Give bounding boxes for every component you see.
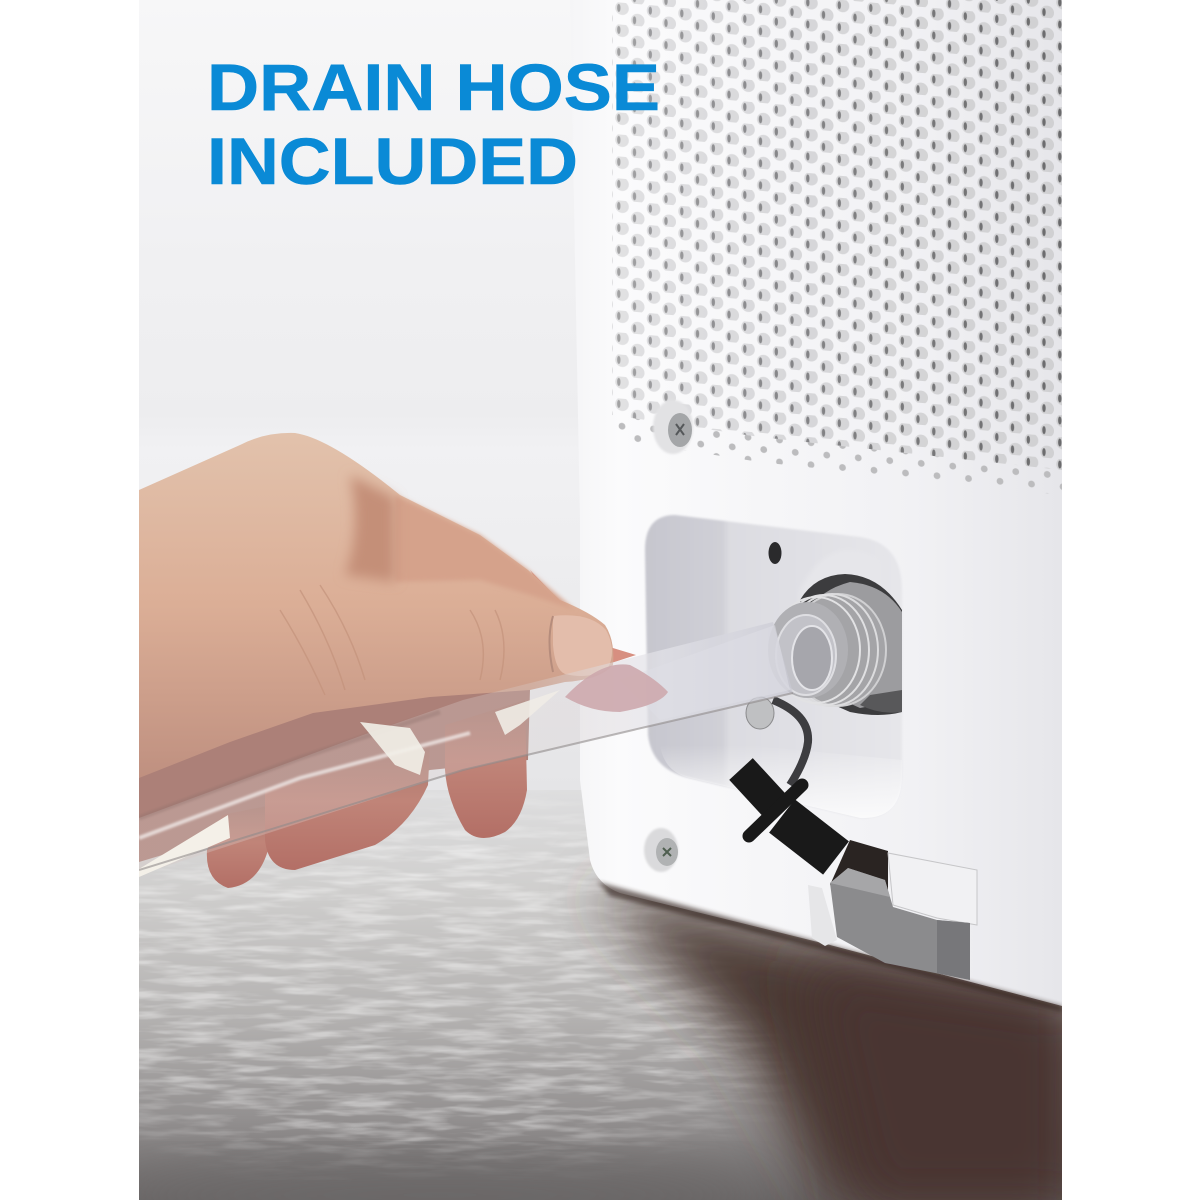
background wall	[139, 2, 582, 790]
transparent drain hose	[139, 622, 793, 877]
knuckle crease shadow	[345, 475, 395, 582]
lower screw	[644, 828, 678, 872]
index fingertip	[530, 570, 636, 670]
ring finger	[265, 770, 429, 870]
index fingernail	[565, 664, 668, 712]
skin wrinkles	[280, 585, 504, 695]
pinky finger	[206, 824, 268, 888]
middle screw	[746, 697, 774, 729]
upper screw	[653, 400, 693, 454]
recessed drain cavity	[645, 515, 902, 818]
headline: DRAIN HOSE	[207, 50, 660, 124]
thumbnail	[553, 615, 612, 676]
wooden floor	[60, 790, 1080, 1200]
product photo panel	[139, 0, 1062, 1200]
hand holding hose	[139, 433, 636, 888]
lower palm seen through hose	[139, 690, 530, 862]
palm and thumb	[139, 433, 613, 778]
headline	[211, 64, 658, 185]
black drain plug	[741, 769, 836, 858]
gray latch mechanism	[808, 840, 977, 980]
index finger shading	[395, 495, 575, 610]
plug strap	[773, 700, 808, 785]
middle finger	[445, 740, 527, 838]
small hole	[768, 542, 782, 564]
headline: INCLUDED	[207, 124, 578, 198]
dehumidifier body	[570, 0, 1062, 1012]
drain port opening	[800, 574, 902, 715]
ventilation perforations	[600, 0, 1062, 500]
threaded nozzle	[768, 594, 886, 706]
